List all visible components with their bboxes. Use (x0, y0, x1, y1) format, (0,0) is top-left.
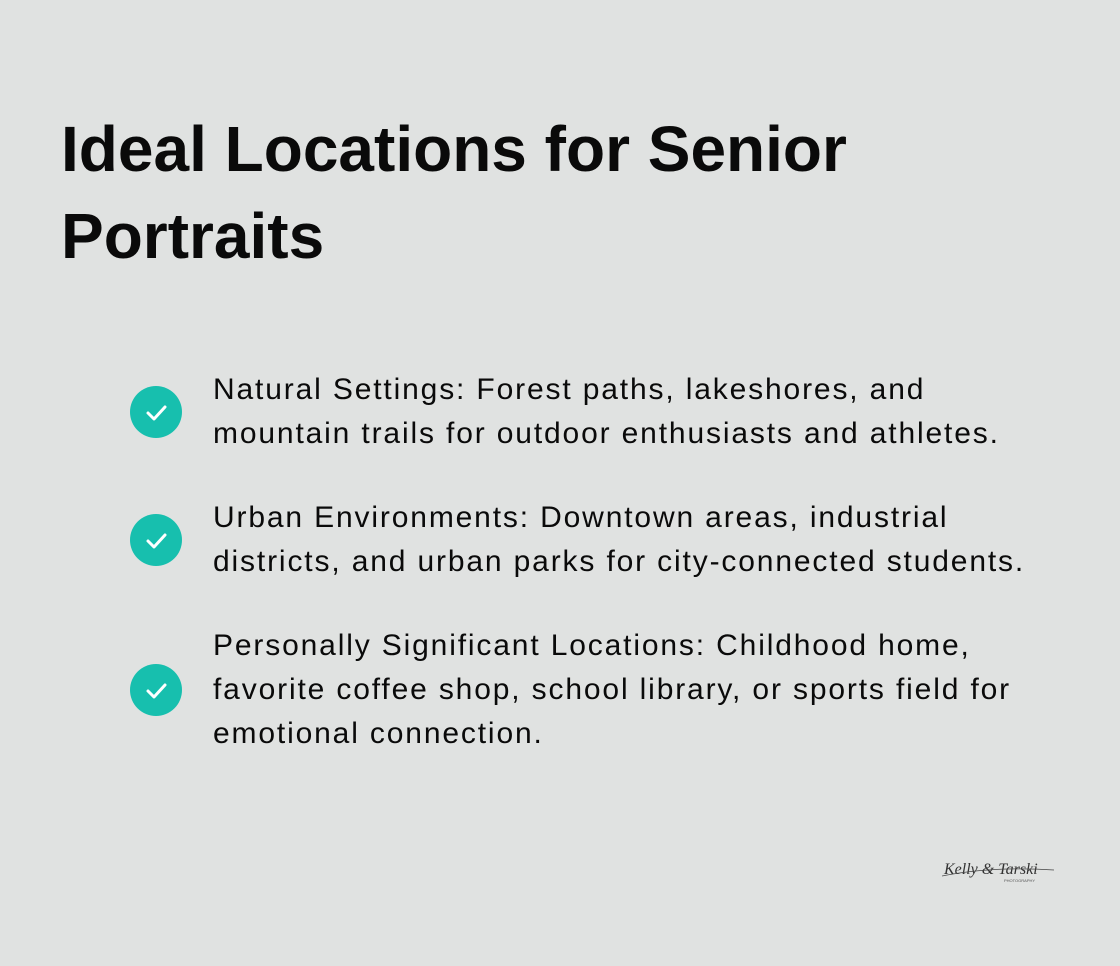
text (213, 501, 1025, 578)
text: favorite coffee shop, school library, or sports field for (213, 673, 1011, 706)
item: personal (130, 629, 1011, 750)
text: Natural Settings: Forest paths, lakeshores, and (213, 373, 925, 406)
text: Urban Environments: Downtown areas, industrial (213, 501, 948, 534)
logo: Kelly & Tarski (943, 861, 1038, 878)
icon: check (130, 514, 182, 566)
text: emotional connection. (213, 717, 544, 750)
title: Ideal Locations for Senior (61, 113, 847, 185)
title (61, 113, 847, 272)
item: urban (130, 501, 1025, 578)
text (213, 373, 1000, 450)
text: mountain trails for outdoor enthusiasts and athletes. (213, 417, 1000, 450)
text: districts, and urban parks for city-connected students. (213, 545, 1025, 578)
title: Portraits (61, 200, 324, 272)
logo: PHOTOGRAPHY (1004, 878, 1035, 883)
text: Personally Significant Locations: Childhood home, (213, 629, 971, 662)
icon: check (130, 664, 182, 716)
icon: check (130, 386, 182, 438)
logo (942, 861, 1054, 883)
text (213, 629, 1011, 750)
item: natural settings (130, 373, 1000, 450)
